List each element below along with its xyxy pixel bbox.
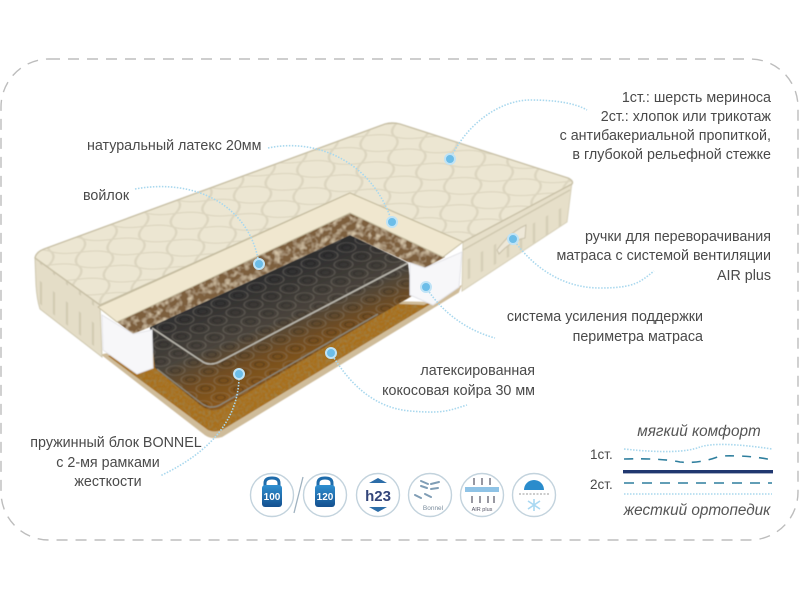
label: spring block	[30, 435, 202, 490]
label: cover layers	[560, 90, 771, 163]
icon: Bonnel spring	[408, 474, 452, 516]
icon: 120 kg load	[304, 474, 346, 516]
heading: firm orthopedic: жесткий ортопедик	[623, 502, 771, 519]
label: coir: латексированная	[420, 363, 535, 379]
label: cover layers: 1ст.: шерсть мериноса	[622, 90, 771, 106]
label: handles: ручки для переворачивания	[585, 229, 771, 245]
right side panel with handle	[462, 182, 572, 291]
label: handles	[556, 229, 771, 284]
heading: soft comfort: мягкий комфорт	[637, 423, 761, 440]
label: spring block: жесткости	[74, 474, 142, 490]
side labels: 2ст.	[590, 477, 613, 492]
label: handles: матраса с системой вентиляции	[556, 248, 771, 264]
upper wavy dashed line	[624, 456, 772, 462]
side labels	[590, 447, 613, 492]
icon: 120 kg load: 120	[317, 492, 334, 503]
label: handles: AIR plus	[717, 268, 771, 284]
dashed rounded border	[1, 59, 798, 540]
icon: air plus ventilation: AIR plus	[472, 507, 493, 513]
navy core line	[623, 470, 773, 473]
label: perimeter support: периметра матраса	[573, 329, 703, 345]
mattress cutaway illustration	[35, 123, 572, 437]
icon: winter summer	[512, 474, 556, 516]
callout dots	[234, 154, 518, 379]
upper dotted line	[624, 444, 772, 452]
label: cover layers: с антибакериальной пропиткой,	[560, 128, 771, 144]
label: felt: войлок	[83, 188, 130, 204]
side labels: 1ст.	[590, 447, 613, 462]
quilted top surface	[35, 123, 572, 305]
label: spring block: пружинный блок BONNEL	[30, 435, 202, 451]
icon: 100 kg load	[250, 474, 294, 516]
label: coir: кокосовая койра 30 мм	[382, 383, 535, 399]
icon row	[250, 474, 556, 516]
label: cover layers: в глубокой рельефной стежке	[572, 147, 771, 163]
white perimeter block right	[410, 252, 462, 305]
label: perimeter support	[507, 309, 703, 345]
icon: height 23: h23	[365, 488, 391, 505]
firmness diagram	[590, 423, 773, 519]
lower dotted line	[624, 493, 772, 495]
icon: 100 kg load: 100	[264, 492, 281, 503]
white perimeter block left	[102, 315, 153, 374]
bottom coir layer	[103, 287, 460, 437]
label: cover layers: 2ст.: хлопок или трикотаж	[601, 109, 771, 125]
latex layer	[98, 193, 463, 322]
label: natural latex: натуральный латекс 20мм	[87, 138, 261, 154]
icon: Bonnel spring: Bonnel	[423, 505, 444, 512]
felt layer	[117, 213, 445, 334]
label: perimeter support: система усиления поддержки	[507, 309, 703, 325]
label: coir	[382, 363, 535, 399]
label: spring block: с 2-мя рамками	[56, 455, 160, 471]
icon: air plus ventilation	[460, 474, 504, 516]
left side panel	[35, 258, 102, 357]
icon: height 23	[356, 474, 400, 516]
slash between load icons	[294, 477, 303, 513]
spring block	[150, 235, 412, 410]
callout leader lines	[135, 100, 654, 476]
lower dashed line	[624, 482, 772, 484]
